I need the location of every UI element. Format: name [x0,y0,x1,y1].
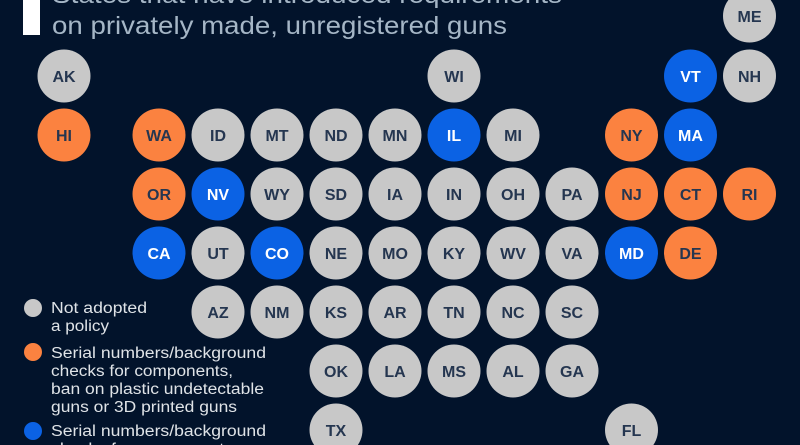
state: IA: IA [387,187,403,204]
state: MS: MS [442,364,466,381]
state: MA: MA [678,128,703,145]
state: PA: PA [561,187,583,204]
state: ID: ID [210,128,226,145]
state: AR [368,286,422,338]
state: SD [310,168,362,220]
state: WA: WA [146,128,172,145]
state: NH: NH [738,69,761,86]
state: SD: SD [325,187,347,204]
state: CT [664,168,717,220]
state: MN [368,108,422,162]
state: ND [310,108,362,162]
state: MA [664,108,717,162]
state: OH: OH [501,187,525,204]
state: KS [310,286,362,338]
state: ME: ME [738,9,762,26]
state: NV [192,168,244,220]
state: DE [664,226,717,280]
state: MO: MO [382,246,408,263]
state: WY [250,168,304,220]
state: DE: DE [679,246,702,263]
state: IA [368,168,422,220]
state: NY [605,108,658,162]
state: AZ [192,286,244,338]
state: FL: FL [622,423,642,440]
state: GA: GA [560,364,584,381]
state: NV: NV [207,187,229,204]
title [52,0,562,40]
state: OH [486,168,540,220]
state: NM [250,286,304,338]
state: VT [664,50,717,102]
state: TX [310,404,362,445]
legend item: not adopted [24,299,147,335]
state: WI: WI [444,69,464,86]
state: RI: RI [742,187,758,204]
state: CA [132,226,186,280]
state: KS: KS [325,305,347,322]
state: TX: TX [326,423,347,440]
state: IL: IL [447,128,461,145]
legend item: orange policy [24,343,266,416]
state: WV: WV [500,246,526,263]
state: KY [428,226,480,280]
state: AZ: AZ [207,305,229,322]
state: WA [132,108,186,162]
state: UT [192,226,244,280]
state: RI [723,168,776,220]
state: AK [38,50,90,102]
state: GA [546,344,598,398]
state: AR: AR [383,305,407,322]
state: LA [368,344,422,398]
state: AK: AK [52,69,76,86]
state: OR: OR [147,187,171,204]
state: MN: MN [383,128,407,145]
state: NE: NE [325,246,347,263]
state: SC [546,286,598,338]
state: WV [486,226,540,280]
legend [24,299,266,445]
state: CT: CT [680,187,701,204]
legend item: orange policy: checks for components, [51,363,233,380]
state: NH [723,50,776,102]
state: MD: MD [619,246,644,263]
legend item: blue policy [24,422,266,445]
state: TN [428,286,480,338]
state: VT: VT [680,69,701,86]
state: NE [310,226,362,280]
state: ID [192,108,244,162]
state: NY: NY [620,128,643,145]
state: FL [605,404,658,445]
state: MS [428,344,480,398]
state: NC [486,286,540,338]
state: MT: MT [265,128,289,145]
state: OR [132,168,186,220]
state: OK: OK [324,364,348,381]
state: OK [310,344,362,398]
state: MD [605,226,658,280]
state: MI [486,108,540,162]
state: IN: IN [446,187,462,204]
state: WI [428,50,480,102]
state: NC: NC [501,305,525,322]
state: LA: LA [384,364,406,381]
state: VA [546,226,598,280]
state: CA: CA [147,246,171,263]
legend item: orange policy: guns or 3D printed guns [51,399,237,416]
legend item: orange policy: ban on plastic undetectable [51,381,264,398]
state: HI: HI [56,128,72,145]
state: NM: NM [265,305,289,322]
state: NJ: NJ [621,187,642,204]
state: IN [428,168,480,220]
state: MT [250,108,304,162]
state: SC: SC [561,305,584,322]
state: IL [428,108,480,162]
state: UT: UT [207,246,229,263]
title accent bar [23,0,40,35]
state: AL [486,344,540,398]
legend item: not adopted: a policy [51,318,109,335]
legend item: blue policy: Serial numbers/background [51,423,266,440]
legend item: not adopted: Not adopted [51,300,147,317]
state: HI [38,108,90,162]
state: ND: ND [324,128,348,145]
state: CO: CO [265,246,289,263]
state: TN: TN [443,305,465,322]
state: MO [368,226,422,280]
state: ME [723,0,776,42]
state: PA [546,168,598,220]
state: AL: AL [502,364,524,381]
state: MI: MI [504,128,522,145]
state: CO [250,226,304,280]
legend item: orange policy: Serial numbers/background [51,345,266,362]
state: KY: KY [443,246,465,263]
title: on privately made, unregistered guns [52,12,507,40]
state: NJ [605,168,658,220]
state: VA: VA [561,246,583,263]
state: WY: WY [264,187,290,204]
